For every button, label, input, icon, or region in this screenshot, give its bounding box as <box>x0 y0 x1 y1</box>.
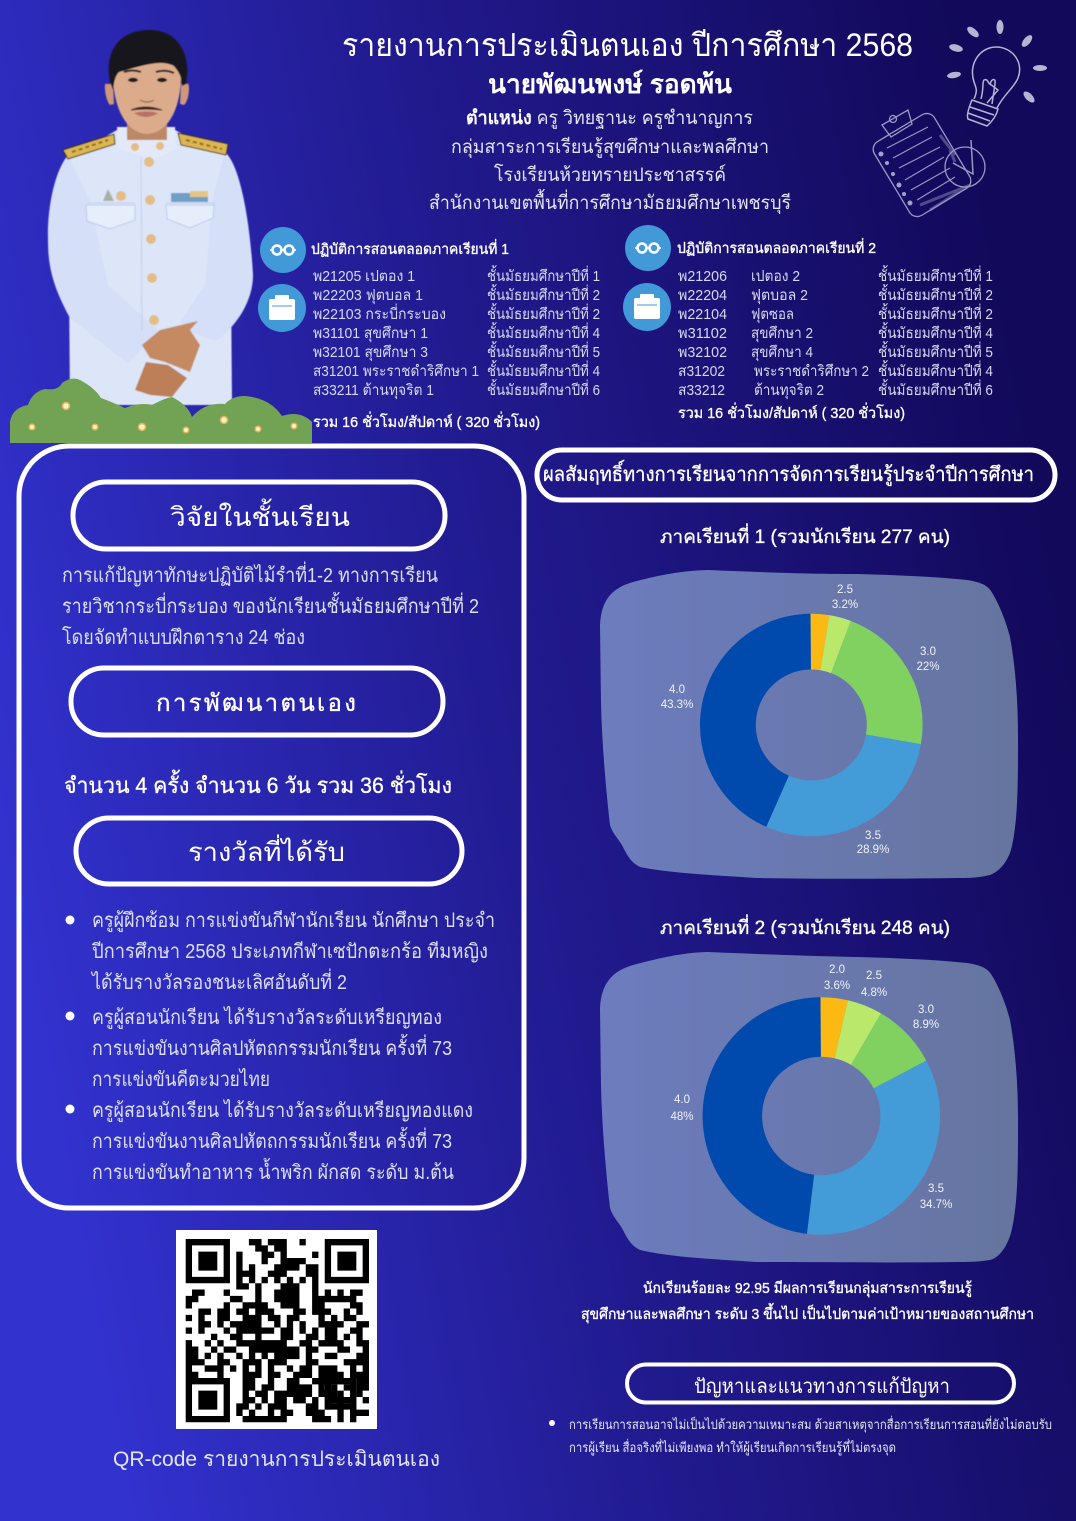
donut chart semester 1 <box>600 570 1018 879</box>
position line: ตำแหน่ง ครู วิทยฐานะ ครูชำนาญการ <box>466 108 753 129</box>
course list semester 2 <box>678 265 993 400</box>
donut chart semester 1: 43.3% <box>661 699 693 711</box>
course list semester 2: ส33212 <box>678 382 725 399</box>
course list semester 2: ชั้นมัธยมศึกษาปีที่ 4 <box>878 360 993 380</box>
course list semester 2: พ32102 <box>678 344 727 361</box>
heading: awards <box>76 818 462 884</box>
heading: awards: รางวัลที่ได้รับ <box>188 834 345 867</box>
heading: classroom research: วิจัยในชั้นเรียน <box>170 498 350 532</box>
donut chart semester 2: 8.9% <box>913 1019 939 1031</box>
donut chart semester 2: 2.5 <box>866 970 882 982</box>
course list semester 1 <box>313 265 600 400</box>
chart title semester 2: ภาคเรียนที่ 2 (รวมนักเรียน 248 คน) <box>660 914 950 939</box>
donut chart semester 1: 22% <box>916 661 940 673</box>
course list semester 2: ฟุตบอล 2 <box>751 287 808 305</box>
course list semester 2: ฟุตซอล <box>751 306 794 324</box>
teacher name: นายพัฒนพงษ์ รอดพ้น <box>488 69 732 99</box>
school line: โรงเรียนห้วยทรายประชาสรรค์ <box>494 163 726 186</box>
donut chart semester 2: 3.5 <box>928 1183 944 1195</box>
heading: learning achievement <box>537 450 1055 500</box>
research description: การแก้ปัญหาทักษะปฏิบัติไม้รำที่1-2 ทางการเรียน <box>62 561 438 587</box>
course list semester 2: พ22104 <box>678 306 727 323</box>
portrait photo of teacher in white uniform <box>48 30 253 405</box>
achievement summary: นักเรียนร้อยละ 92.95 มีผลการเรียนกลุ่มสาระการเรียนรู้ <box>643 1280 972 1298</box>
icon: briefcase 1 <box>258 284 306 332</box>
donut chart semester 1: 4.0 <box>669 684 685 696</box>
problems text <box>549 1415 1052 1456</box>
panel: semester 2 teaching <box>623 225 993 422</box>
course list semester 1: ส31201 พระราชดำริศึกษา 1 <box>313 363 479 380</box>
course list semester 1: พ32101 สุขศึกษา 3 <box>313 344 428 362</box>
total hours semester 1: รวม 16 ชั่วโมง/สัปดาห์ ( 320 ชั่วโมง) <box>313 411 540 431</box>
chart title semester 1: ภาคเรียนที่ 1 (รวมนักเรียน 277 คน) <box>660 523 950 548</box>
award list: การแข่งขันคีตะมวยไทย <box>92 1068 270 1091</box>
donut chart semester 2: 3.0 <box>918 1004 934 1016</box>
heading: self development <box>71 668 443 735</box>
course list semester 2: พ31102 <box>678 325 727 342</box>
total hours semester 2: รวม 16 ชั่วโมง/สัปดาห์ ( 320 ชั่วโมง) <box>678 402 905 422</box>
donut chart semester 2: 3.6% <box>824 980 850 992</box>
course list semester 1: ชั้นมัธยมศึกษาปีที่ 4 <box>487 360 600 380</box>
heading: problems and solutions <box>627 1364 1014 1402</box>
course list semester 1: ชั้นมัธยมศึกษาปีที่ 1 <box>487 265 600 285</box>
donut chart semester 2: 2.0 <box>829 964 845 976</box>
course list semester 2: ชั้นมัธยมศึกษาปีที่ 6 <box>878 379 993 399</box>
research description: โดยจัดทำแบบฝึกตาราง 24 ช่อง <box>62 626 305 649</box>
donut chart semester 2 <box>600 952 1018 1262</box>
QR caption: QR-code รายงานการประเมินตนเอง <box>113 1448 440 1471</box>
course list semester 1: ชั้นมัธยมศึกษาปีที่ 2 <box>487 303 600 323</box>
course list semester 2: พ22204 <box>678 287 727 304</box>
heading semester 2: ปฏิบัติการสอนตลอดภาคเรียนที่ 2 <box>677 238 876 257</box>
icon: clipboard checklist <box>870 110 985 220</box>
award list: การแข่งขันงานศิลปหัตถกรรมนักเรียน ครั้งที่ 73 <box>92 1127 452 1153</box>
donut chart semester 2: 48% <box>670 1111 694 1123</box>
achievement summary: สุขศึกษาและพลศึกษา ระดับ 3 ขึ้นไป เป็นไปตามค่าเป้าหมายของสถานศึกษา <box>581 1303 1034 1324</box>
course list semester 2: พระราชดำริศึกษา 2 <box>754 363 869 380</box>
award list: การแข่งขันงานศิลปหัตถกรรมนักเรียน ครั้งที่ 73 <box>92 1034 452 1060</box>
icon: glasses 1 <box>260 227 306 273</box>
course list semester 2: ชั้นมัธยมศึกษาปีที่ 2 <box>878 284 993 304</box>
course list semester 1: ชั้นมัธยมศึกษาปีที่ 6 <box>487 379 600 399</box>
course list semester 2: ชั้นมัธยมศึกษาปีที่ 4 <box>878 322 993 342</box>
donut chart semester 2: 4.0 <box>674 1094 690 1106</box>
donut chart semester 1: 3.5 <box>865 830 881 842</box>
course list semester 2: สุขศึกษา 4 <box>751 344 813 362</box>
award list: ปีการศึกษา 2568 ประเภทกีฬาเซปักตะกร้อ ทีมหญิง <box>92 941 488 963</box>
award list: ได้รับรางวัลรองชนะเลิศอันดับที่ 2 <box>90 968 347 994</box>
course list semester 1: พ22203 ฟุตบอล 1 <box>313 287 423 305</box>
course list semester 1: พ21205 เปตอง 1 <box>313 268 415 285</box>
panel: research, development and awards <box>19 446 524 1208</box>
research description <box>62 561 479 649</box>
donut chart semester 1: 3.2% <box>832 599 858 611</box>
education office line: สำนักงานเขตพื้นที่การศึกษามัธยมศึกษาเพชรบุรี <box>429 189 791 215</box>
research description: รายวิชากระบี่กระบอง ของนักเรียนชั้นมัธยมศึกษาปีที่ 2 <box>62 592 479 618</box>
award list: ครูผู้สอนนักเรียน ได้รับรางวัลระดับเหรียญทองแดง <box>92 1099 473 1123</box>
course list semester 2: ชั้นมัธยมศึกษาปีที่ 1 <box>878 265 993 285</box>
donut chart semester 2: 4.8% <box>861 987 887 999</box>
self development summary: จำนวน 4 ครั้ง จำนวน 6 วัน รวม 36 ชั่วโมง <box>64 770 452 798</box>
donut chart semester 1: 3.0 <box>920 646 936 658</box>
icon: glasses 2 <box>625 225 671 271</box>
panel: semester 1 teaching <box>258 227 600 431</box>
award list <box>66 910 495 1184</box>
award list: ครูผู้สอนนักเรียน ได้รับรางวัลระดับเหรียญทอง <box>92 1006 442 1030</box>
heading: learning achievement: ผลสัมฤทธิ์ทางการเรียนจากการจัดการเรียนรู้ประจำปีการศึกษา <box>543 459 1034 487</box>
course list semester 1: ชั้นมัธยมศึกษาปีที่ 5 <box>487 341 600 361</box>
heading: self development: การพัฒนาตนเอง <box>156 690 356 717</box>
achievement summary <box>581 1280 1034 1324</box>
course list semester 1: ส33211 ต้านทุจริต 1 <box>313 382 434 400</box>
learning area line: กลุ่มสาระการเรียนรู้สุขศึกษาและพลศึกษา <box>451 136 769 159</box>
icon: briefcase 2 <box>623 283 671 331</box>
heading semester 1: ปฏิบัติการสอนตลอดภาคเรียนที่ 1 <box>311 239 509 258</box>
heading: problems and solutions: ปัญหาและแนวทางการแก้ปัญหา <box>694 1376 950 1398</box>
course list semester 1: พ22103 กระบี่กระบอง <box>313 303 446 323</box>
course list semester 2: ส31202 <box>678 363 725 380</box>
donut chart semester 1: 2.5 <box>837 584 853 596</box>
award list: ครูผู้ฝึกซ้อม การแข่งขันกีฬานักเรียน นักศึกษา ประจำ <box>92 910 495 933</box>
problems text: การผู้เรียน สื่อจริงที่ไม่เพียงพอ ทำให้ผู้เรียนเกิดการเรียนรู้ที่ไม่ตรงจุด <box>569 1439 896 1456</box>
course list semester 2: เปตอง 2 <box>751 268 800 285</box>
course list semester 1: ชั้นมัธยมศึกษาปีที่ 2 <box>487 284 600 304</box>
donut chart semester 1: 28.9% <box>857 844 889 856</box>
title: รายงานการประเมินตนเอง ปีการศึกษา 2568 <box>342 27 913 63</box>
QR code <box>176 1230 377 1429</box>
course list semester 2: สุขศึกษา 2 <box>751 325 813 343</box>
course list semester 2: พ21206 <box>678 268 727 285</box>
donut chart semester 2: 34.7% <box>920 1199 952 1211</box>
course list semester 2: ชั้นมัธยมศึกษาปีที่ 2 <box>878 303 993 323</box>
course list semester 1: พ31101 สุขศึกษา 1 <box>313 325 428 343</box>
heading: classroom research <box>73 482 445 549</box>
course list semester 2: ต้านทุจริต 2 <box>754 382 824 400</box>
green flower bush <box>10 379 312 443</box>
course list semester 2: ชั้นมัธยมศึกษาปีที่ 5 <box>878 341 993 361</box>
award list: การแข่งขันทำอาหาร น้ำพริก ผักสด ระดับ ม.ต้น <box>92 1158 454 1184</box>
icon: light bulb <box>947 20 1047 126</box>
course list semester 1: ชั้นมัธยมศึกษาปีที่ 4 <box>487 322 600 342</box>
